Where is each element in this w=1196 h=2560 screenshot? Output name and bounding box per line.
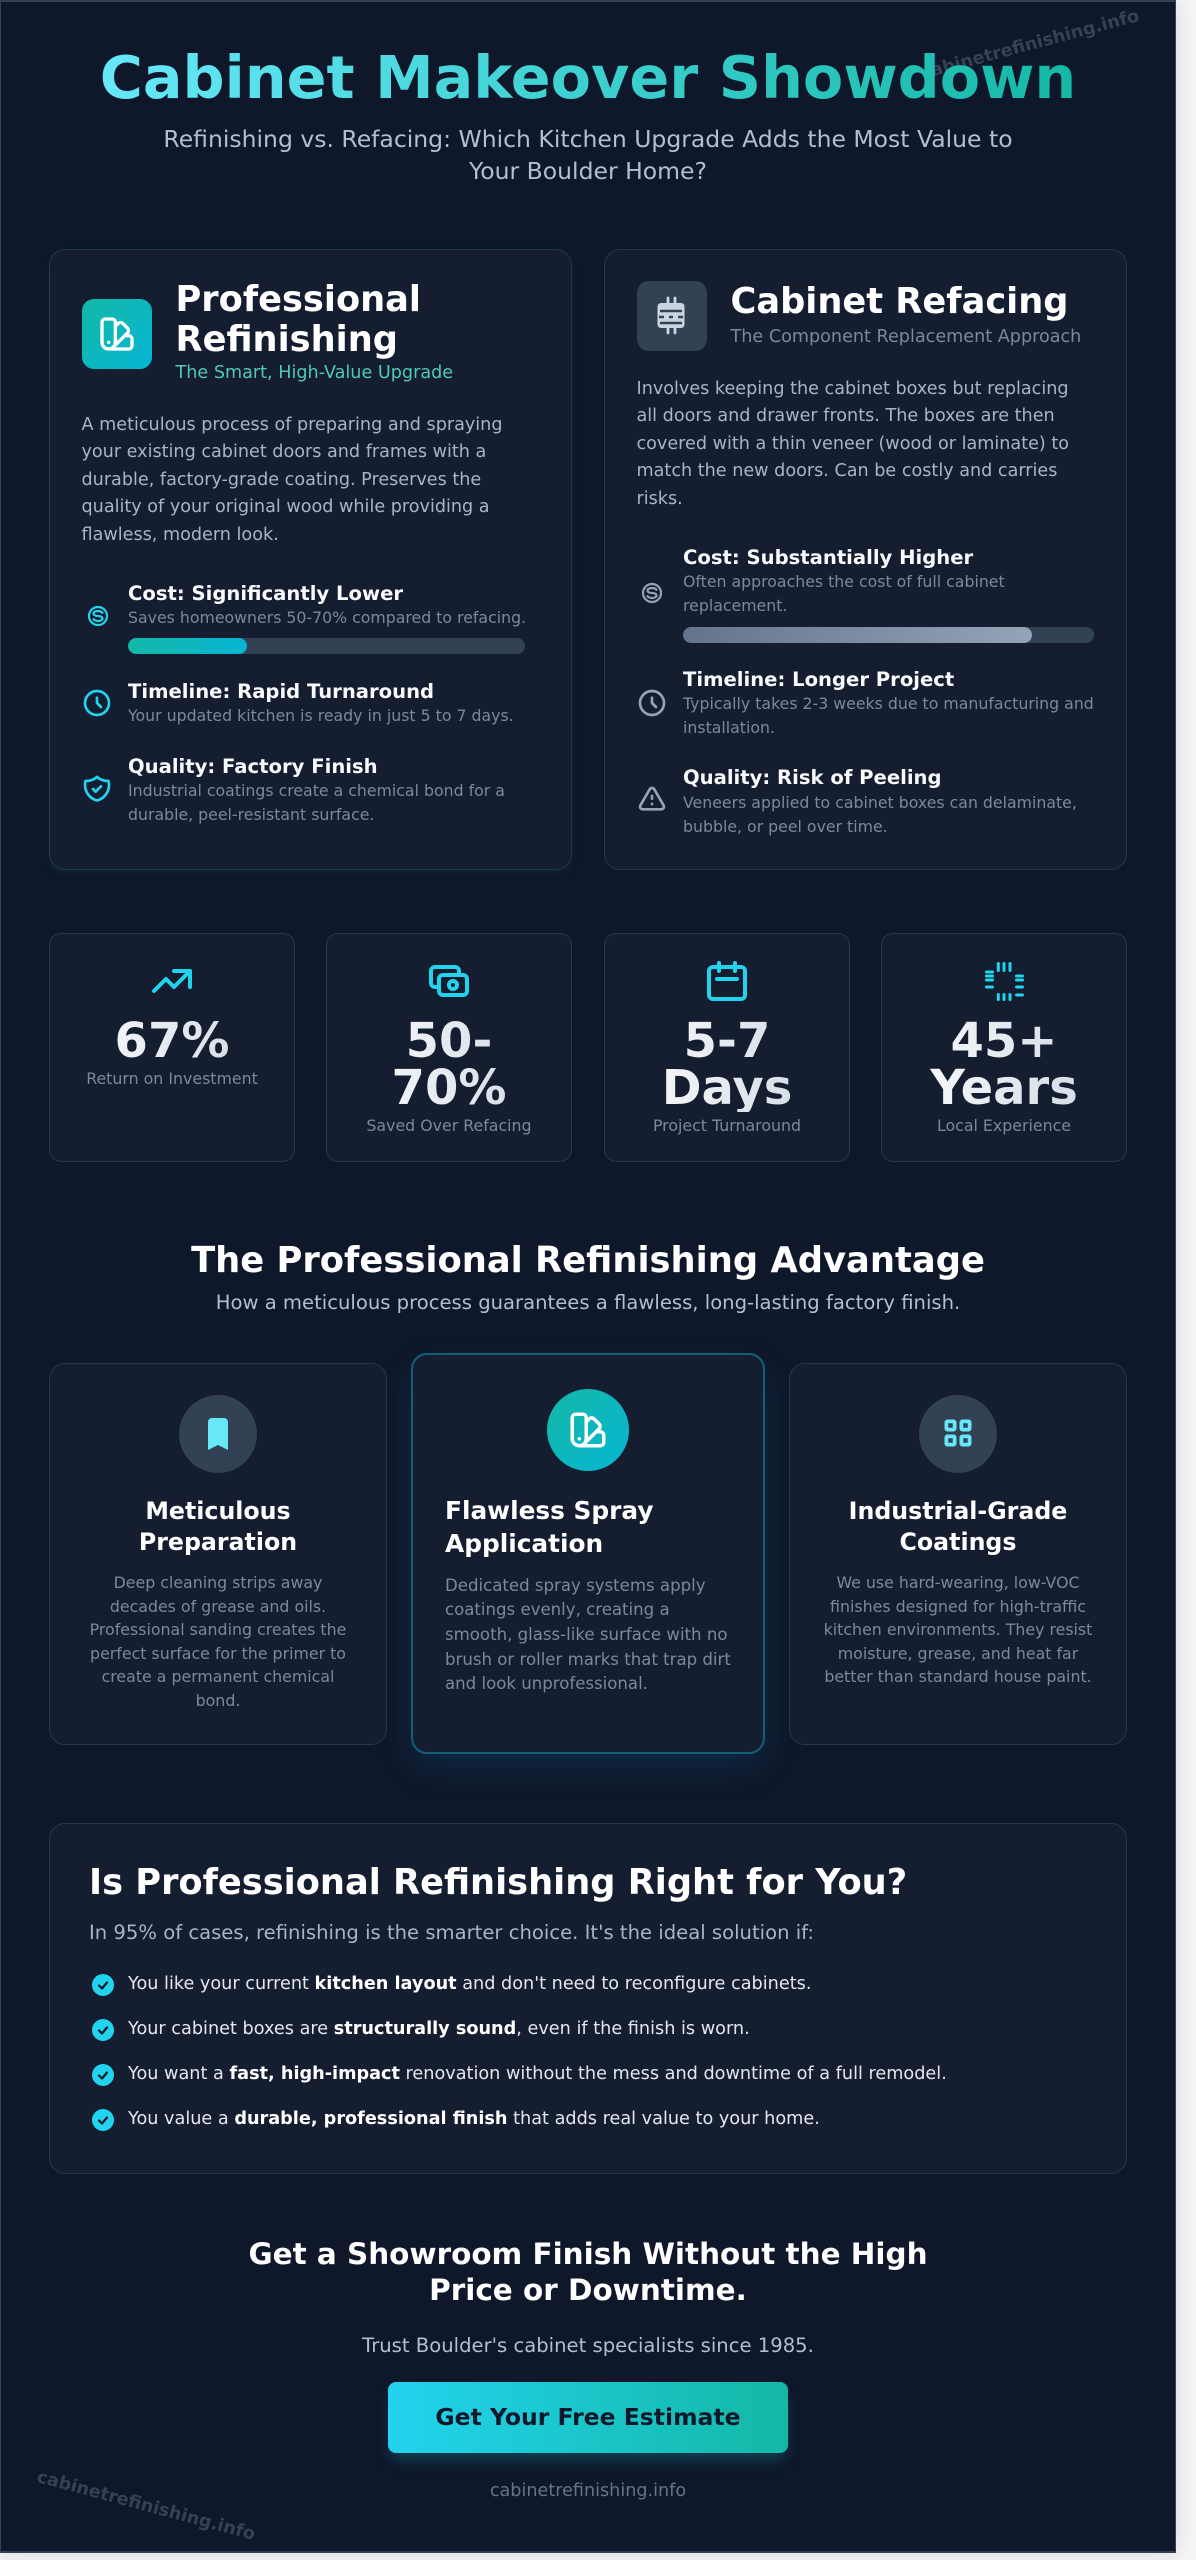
panel: coatings [789,1363,1127,1745]
value [882,1018,1126,1112]
text: Dedicated spray systems apply [445,1576,706,1594]
description: quality of your original wood while providing a [82,497,490,517]
button [388,2382,788,2453]
heading: Refinishing [176,319,398,360]
description [82,415,502,545]
subtitle: Refinishing vs. Refacing: Which Kitchen Upgrade Adds the Most Value to [163,125,1013,153]
check item 2 [92,2019,750,2041]
description: match the new doors. Can be costly and carries [636,461,1057,481]
icon: shield [84,776,110,802]
row: cost text [683,572,1005,615]
row: cost title: Cost: Substantially Higher [683,546,973,569]
subtitle [163,125,1013,184]
icon: check [92,2019,114,2041]
text: You value a durable, professional finish that adds real value to your home. [128,2109,820,2129]
icon: warning [638,786,666,811]
bar: cost [683,627,1094,643]
text: finishes designed for high-traffic [830,1597,1086,1616]
row: quality text [683,793,1077,836]
heading [445,1496,654,1558]
row: timeline title: Timeline: Rapid Turnaround [128,680,434,703]
icon: check [92,2109,114,2131]
icon: swatch [82,299,152,369]
icon: clock [638,690,666,716]
domain: cabinetrefinishing.info [490,2481,686,2501]
icon: grid [919,1395,997,1473]
icon: calendar [707,961,747,1001]
text: bond. [196,1691,240,1710]
heading: Professional [176,279,421,320]
icon: bookmark [179,1395,257,1473]
icon: clock [84,690,110,716]
row: timeline text: installation. [683,718,775,737]
row: quality text: Veneers applied to cabinet boxes can delaminate, [683,793,1077,812]
panel: professional refinishing [49,249,572,870]
value [50,1018,294,1064]
description: your existing cabinet doors and frames with a [82,442,486,462]
icon: swatch [547,1388,629,1470]
call to action heading [248,2237,928,2307]
row: cost text: Saves homeowners 50-70% compared to refacing. [128,608,526,627]
row: timeline text [682,694,1094,737]
panel: preparation [49,1363,387,1745]
description: durable, factory-grade coating. Preserves the [82,470,481,490]
text: We use hard-wearing, low-VOC [836,1573,1080,1592]
section subheading: How a meticulous process guarantees a flawless, long-lasting factory finish. [216,1291,960,1314]
row: timeline text: Your updated kitchen is ready in just 5 to 7 days. [128,706,514,725]
value: 67% [115,1012,229,1068]
text: You like your current kitchen layout and don't need to reconfigure cabinets. [128,1974,811,1994]
heading: Application [445,1529,603,1558]
stat card: ROI [49,933,295,1162]
row: timeline title: Timeline: Longer Project [683,668,954,691]
heading [139,1497,297,1556]
heading: Meticulous [145,1497,291,1525]
icon: cost [88,606,108,626]
heading: Is Professional Refinishing Right for You? [89,1862,907,1903]
label: Saved Over Refacing [366,1116,532,1135]
check item 3 [92,2064,947,2086]
text: Deep cleaning strips away [114,1573,322,1592]
label: Local Experience [937,1116,1071,1135]
stat card: savings [326,933,572,1162]
text: and look unprofessional. [445,1674,648,1693]
icon: trend [152,968,192,994]
intro: In 95% of cases, refinishing is the smarter choice. It's the ideal solution if: [89,1921,814,1944]
text: Professional sanding creates the [90,1620,346,1639]
row: quality title: Quality: Risk of Peeling [683,766,942,789]
heading: Preparation [139,1528,297,1556]
heading [849,1497,1067,1556]
heading: Industrial-Grade [849,1497,1067,1525]
panel: is refinishing right for you [49,1823,1127,2174]
icon: cash [429,965,469,997]
stat card: turnaround [604,933,850,1162]
tagline: The Smart, High-Value Upgrade [176,363,453,383]
description [636,379,1069,509]
value [605,1018,849,1112]
stat card: experience [881,933,1127,1162]
value: 70% [392,1060,506,1116]
row: quality text: durable, peel-resistant surface. [128,805,374,824]
icon: ticks [985,962,1024,1001]
check item 4 [92,2109,820,2131]
bar: cost [128,638,525,654]
panel: spray application [411,1353,765,1754]
icon: cost [642,582,662,604]
panel: cabinet refacing [604,249,1127,870]
button: Get Your Free Estimate [435,2403,741,2431]
value: 50- [406,1012,492,1068]
call to action heading: Get a Showroom Finish Without the High [248,2237,928,2271]
text: Your cabinet boxes are structurally sound, even if the finish is worn. [128,2019,750,2039]
call to action text: Trust Boulder's cabinet specialists since 1985. [362,2334,814,2357]
icon: check [92,1974,114,1996]
description: flawless, modern look. [82,525,279,545]
watermark: bottom left: cabinetrefinishing.info [35,2467,257,2545]
row: cost text: Often approaches the cost of full cabinet [683,572,1005,591]
value [327,1018,571,1112]
row: quality text [128,781,505,824]
label: Project Turnaround [653,1116,801,1135]
heading: Coatings [900,1528,1016,1556]
description: Involves keeping the cabinet boxes but replacing [636,379,1069,399]
value: 45+ [950,1012,1058,1068]
title: Cabinet Makeover Showdown [100,43,1076,112]
watermark: top right: cabinetrefinishing.info [919,6,1141,84]
description: all doors and drawer fronts. The boxes are then [636,406,1055,426]
heading [176,279,421,360]
text [445,1576,731,1693]
section heading: The Professional Refinishing Advantage [191,1240,985,1281]
text: better than standard house paint. [824,1667,1092,1686]
call to action heading: Price or Downtime. [429,2273,747,2307]
row: timeline text: Typically takes 2-3 weeks due to manufacturing and [683,694,1094,713]
row: cost title: Cost: Significantly Lower [128,582,403,605]
row: quality text: Industrial coatings create a chemical bond for a [128,781,505,800]
row: quality text: bubble, or peel over time. [683,817,888,836]
value: Days [662,1060,792,1116]
text: create a permanent chemical [102,1667,334,1686]
value: Years [930,1060,1078,1116]
label: Return on Investment [86,1069,258,1088]
description: risks. [636,489,683,509]
heading: Cabinet Refacing [730,281,1068,322]
text: smooth, glass-like surface with no [445,1625,727,1644]
value: 5-7 [684,1012,770,1068]
tagline: The Component Replacement Approach [730,327,1081,347]
text: You want a fast, high-impact renovation without the mess and downtime of a full remodel. [128,2064,947,2084]
heading: Flawless Spray [445,1496,654,1525]
row: cost text: replacement. [683,596,787,615]
check item 1 [92,1974,811,1996]
text: kitchen environments. They resist [824,1620,1092,1639]
text [90,1573,346,1710]
text: decades of grease and oils. [110,1597,326,1616]
text: moisture, grease, and heat far [838,1644,1078,1663]
subtitle: Your Boulder Home? [469,156,707,184]
row: quality title: Quality: Factory Finish [128,755,378,778]
text: perfect surface for the primer to [90,1644,346,1663]
description: covered with a thin veneer (wood or laminate) to [636,434,1069,454]
description: A meticulous process of preparing and spraying [82,415,502,435]
icon: check [92,2064,114,2086]
text: coatings evenly, creating a [445,1600,670,1619]
text [824,1573,1092,1686]
icon: cabinet [637,281,707,351]
text: brush or roller marks that trap dirt [445,1650,731,1669]
